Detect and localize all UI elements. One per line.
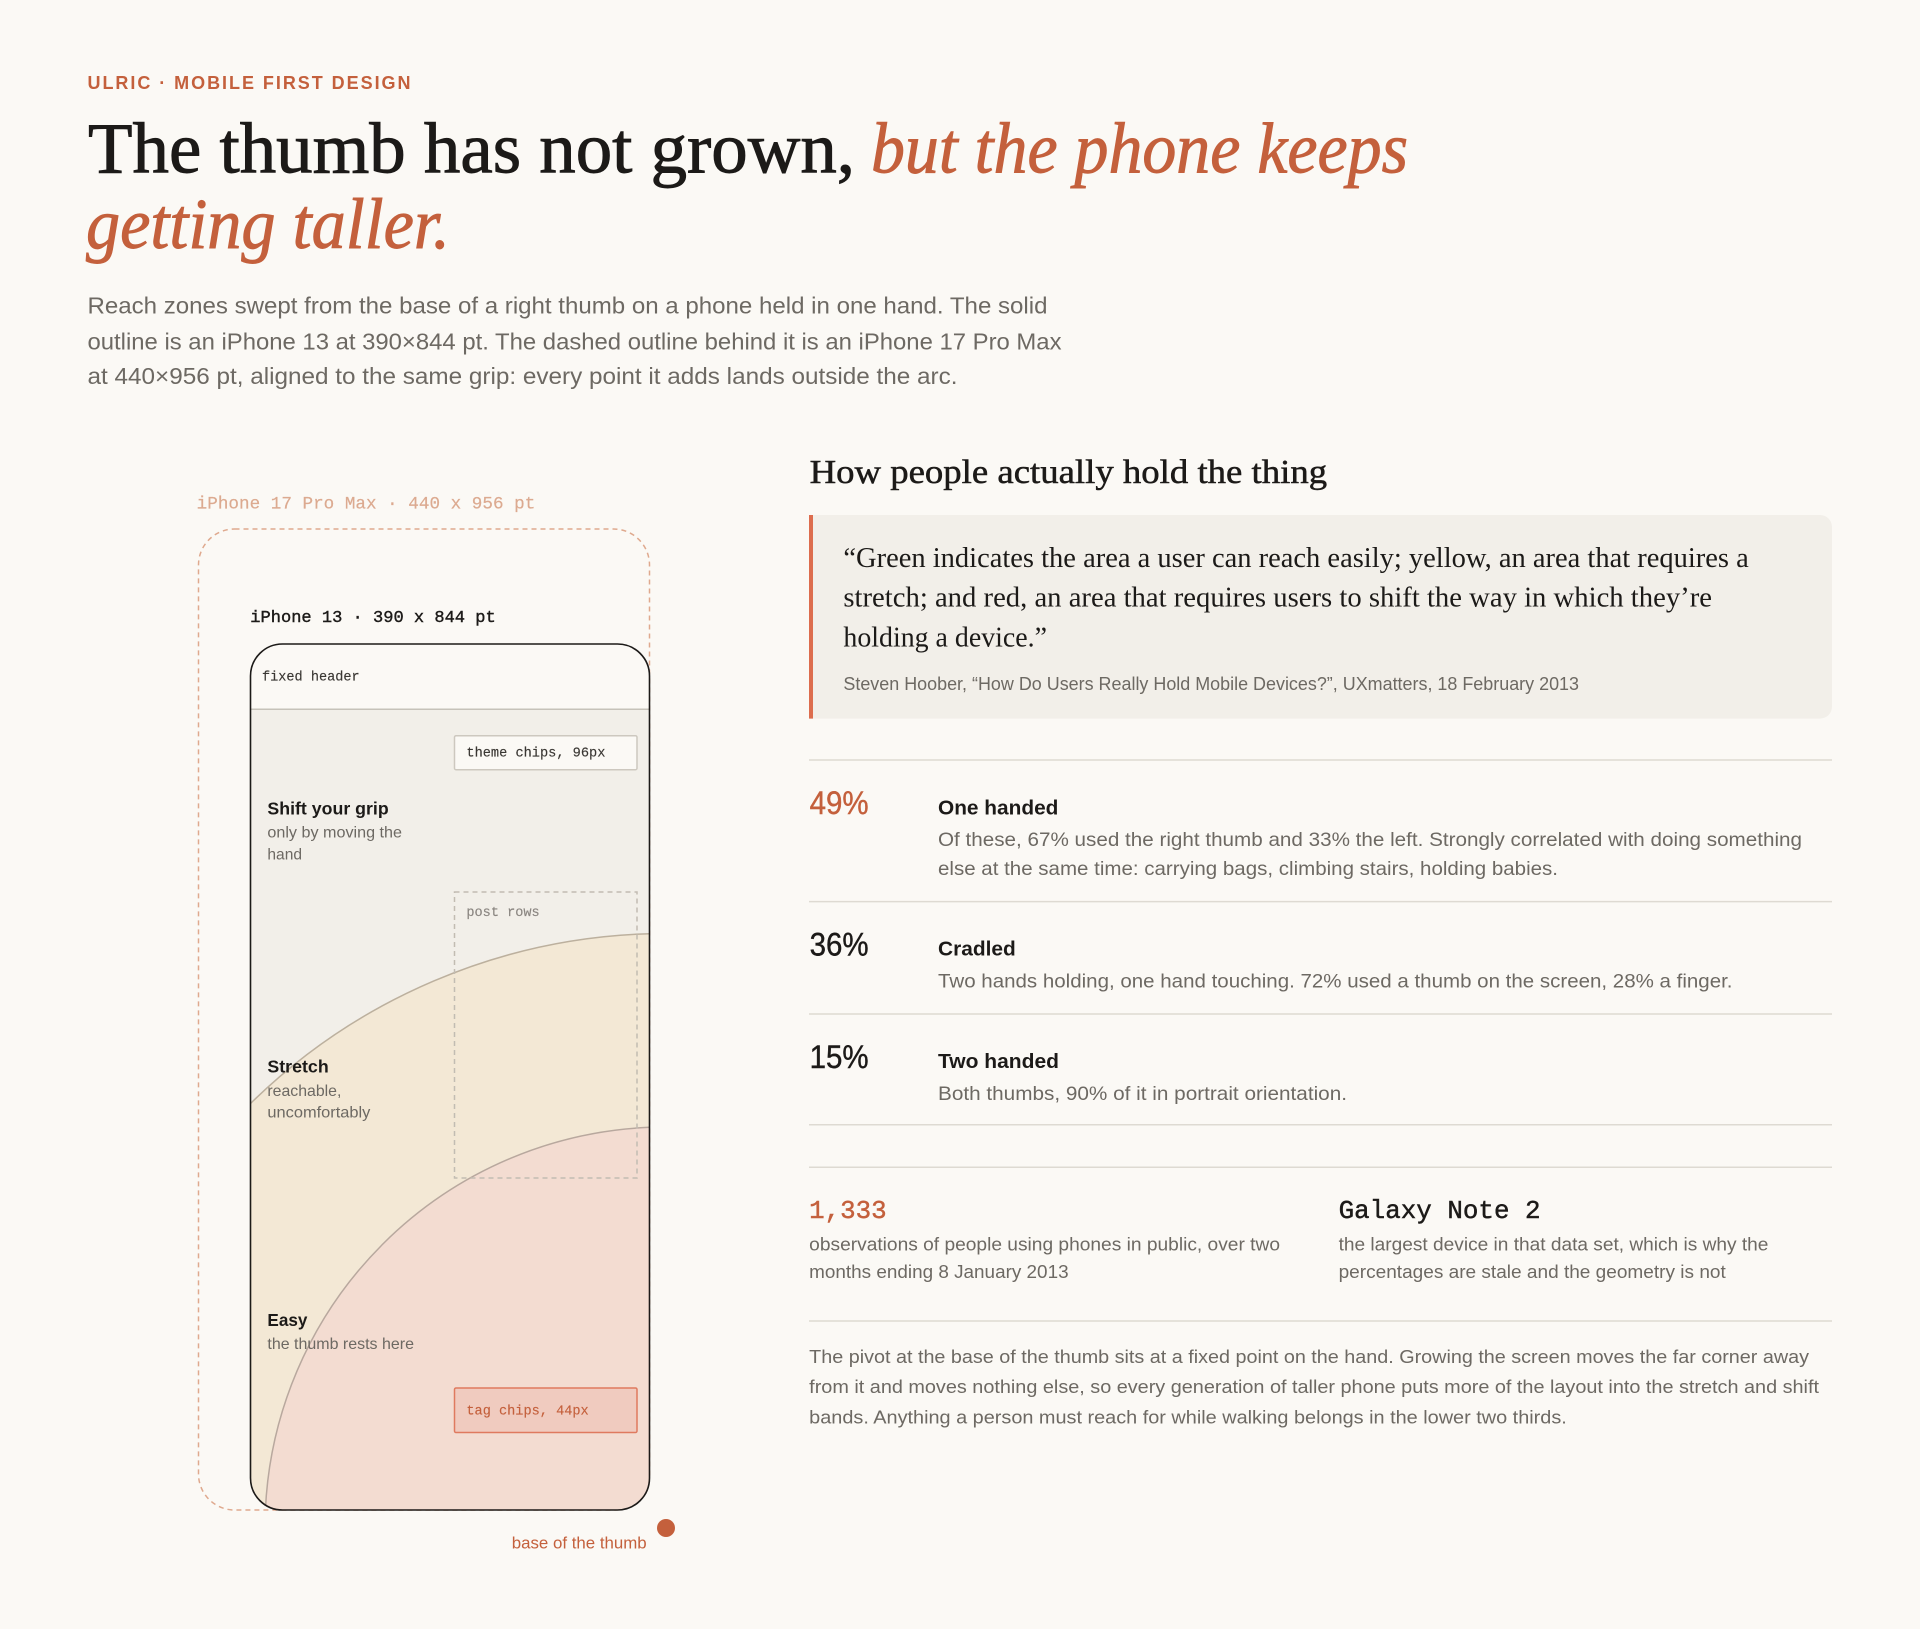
stretch arc (250, 934, 650, 1104)
zone: shift your grip (252, 710, 649, 1101)
intro paragraph: Reach zones swept from the base of a right thumb on a phone held in one hand. The solid (88, 293, 1048, 319)
stat row: one handed (810, 785, 1802, 880)
fact: observations: months ending 8 January 2013 (809, 1262, 1069, 1282)
intro paragraph: at 440×956 pt, aligned to the same grip: every point it adds lands outside the arc. (88, 363, 957, 389)
header divider (250, 708, 650, 710)
label: iPhone 17 Pro Max: iPhone 17 Pro Max · 440 x 956 pt (197, 494, 535, 514)
right column (809, 454, 1832, 1428)
zone label: easy (267, 1310, 414, 1353)
stat row: two handed: Both thumbs, 90% of it in portrait orientation. (938, 1083, 1347, 1105)
zone label: shift your grip: only by moving the (267, 825, 402, 842)
closing paragraph: from it and moves nothing else, so every generation of taller phone puts more of the layout into the stretch and shift (809, 1376, 1820, 1397)
zone label: stretch: uncomfortably (267, 1104, 370, 1122)
zone label: easy: the thumb rests here (267, 1336, 414, 1353)
thumb pivot dot (657, 1519, 675, 1537)
fact: observations (809, 1197, 1280, 1282)
pivot label: base of the thumb (512, 1533, 647, 1552)
title: but the phone keeps (871, 108, 1408, 188)
section heading: How people actually hold the thing (810, 454, 1327, 491)
intro paragraph (88, 293, 1062, 389)
stat row: cradled: 36% (810, 926, 869, 962)
intro paragraph: outline is an iPhone 13 at 390×844 pt. The dashed outline behind it is an iPhone 17 Pro Max (88, 329, 1062, 355)
closing paragraph: bands. Anything a person must reach for while walking belongs in the lower two thirds. (809, 1406, 1567, 1428)
eyebrow: ULRIC · MOBILE FIRST DESIGN (88, 73, 410, 93)
header block (86, 73, 1408, 389)
dashed outline: iPhone 17 Pro Max (198, 529, 650, 1510)
panel: quote (809, 515, 1832, 719)
stat row: one handed: else at the same time: carrying bags, climbing stairs, holding babies. (938, 858, 1558, 880)
stat row: one handed: Of these, 67% used the right thumb and 33% the left. Strongly correlated with doing something (938, 829, 1802, 851)
post rows box: post rows (466, 906, 540, 921)
fact: largest device: percentages are stale and the geometry is not (1339, 1262, 1726, 1282)
phone diagram (197, 494, 675, 1552)
quote source: Steven Hoober, “How Do Users Really Hold Mobile Devices?”, UXmatters, 18 February 2013 (843, 674, 1579, 694)
zone label: shift your grip (267, 798, 402, 864)
title: The thumb has not grown, (88, 108, 855, 188)
phone outline (250, 644, 650, 1510)
quote text: “Green indicates the area a user can reach easily; yellow, an area that requires a (843, 543, 1749, 574)
zone label: easy: Easy (267, 1310, 308, 1330)
stat row: two handed: Two handed (938, 1050, 1059, 1073)
stat row: one handed: One handed (938, 796, 1058, 819)
stat row: two handed (810, 1039, 1347, 1105)
fixed header label: fixed header (262, 671, 360, 686)
zone: stretch (250, 934, 650, 1510)
label: iPhone 13: iPhone 13 · 390 x 844 pt (250, 609, 496, 628)
zone label: shift your grip: hand (267, 846, 302, 864)
closing paragraph (809, 1346, 1820, 1428)
stat row: cradled (810, 926, 1732, 992)
stat row: two handed: 15% (810, 1039, 869, 1075)
tag chips box: tag chips, 44px (466, 1405, 589, 1420)
zone label: stretch (267, 1056, 370, 1122)
fixed header background (250, 644, 650, 709)
zone label: stretch: Stretch (267, 1056, 329, 1076)
theme chips box (454, 736, 637, 770)
tag chips box (454, 1388, 637, 1432)
fact: largest device: the largest device in that data set, which is why the (1339, 1234, 1768, 1254)
phone: iPhone 13 screen zones (250, 644, 650, 1510)
quote text (843, 543, 1749, 653)
stat row: one handed: 49% (810, 785, 869, 821)
zone: easy (265, 1127, 650, 1510)
zone label: stretch: reachable, (267, 1083, 341, 1100)
fact: largest device: Galaxy Note 2 (1339, 1197, 1541, 1226)
fact: largest device (1339, 1197, 1768, 1282)
closing paragraph: The pivot at the base of the thumb sits at a fixed point on the hand. Growing the screen moves the far corner away (809, 1346, 1810, 1367)
title (86, 108, 1408, 264)
quote text: holding a device.” (843, 622, 1047, 653)
fact: observations: observations of people using phones in public, over two (809, 1234, 1280, 1254)
fact: observations: 1,333 (809, 1197, 887, 1226)
stat row: cradled: Two hands holding, one hand touching. 72% used a thumb on the screen, 28% a finger. (938, 970, 1732, 992)
easy arc (265, 1127, 650, 1510)
stat row: cradled: Cradled (938, 938, 1016, 961)
zone label: shift your grip: Shift your grip (267, 798, 389, 818)
quote text: stretch; and red, an area that requires users to shift the way in which they’re (843, 582, 1712, 614)
post rows box (454, 892, 637, 1178)
title: getting taller. (86, 184, 450, 264)
theme chips box: theme chips, 96px (466, 746, 605, 761)
